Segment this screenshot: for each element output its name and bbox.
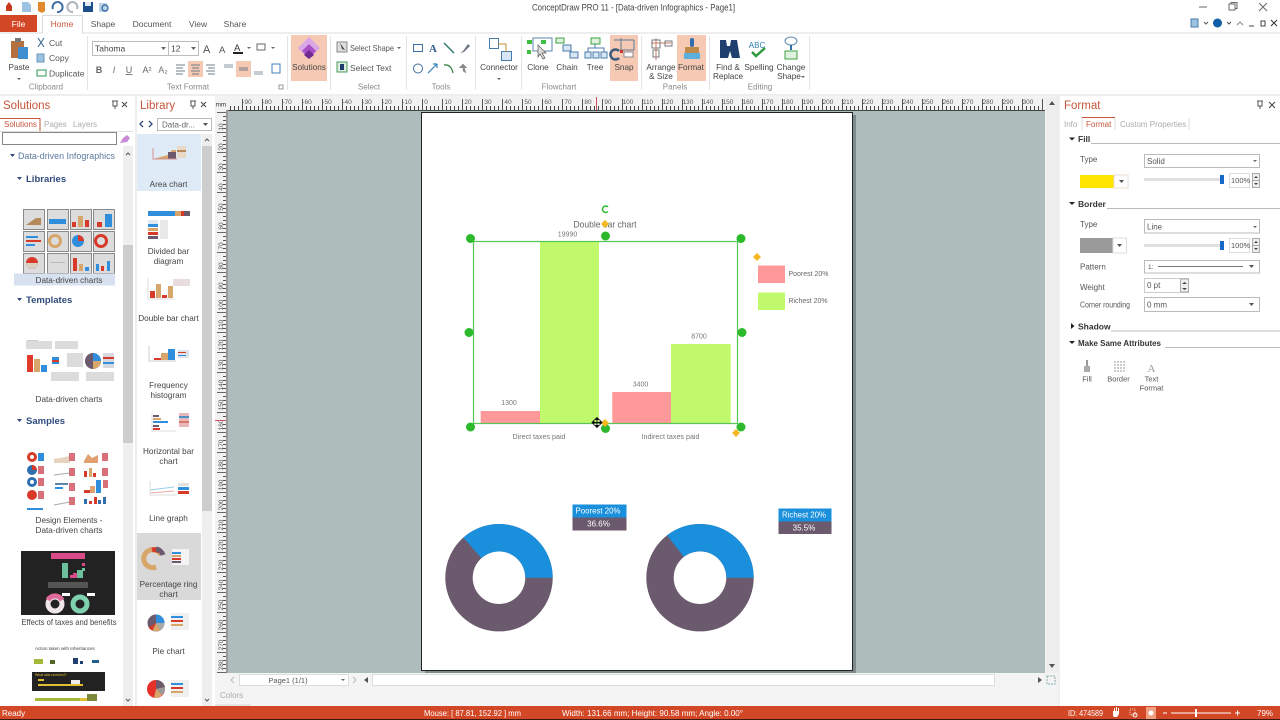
library scrollbar — [202, 134, 212, 706]
tree: Samples: Samples — [26, 416, 65, 427]
vertical ruler: 150 — [218, 399, 225, 410]
vertical ruler: 50 — [218, 203, 225, 211]
selection frame and handles — [464, 206, 761, 437]
status bar: 79% — [1257, 709, 1273, 718]
format panel title: Format — [1064, 100, 1101, 112]
horizontal ruler: 110 — [643, 99, 654, 106]
horizontal ruler: -30 — [362, 99, 372, 106]
ribbon button: Solutions — [291, 35, 327, 81]
bar: indirect taxes richest: 8700 — [691, 334, 707, 340]
sample thumbnail: Design Elements: Design Elements - — [36, 516, 103, 525]
canvas background and rulers — [215, 96, 1059, 706]
ribbon group: Editing — [713, 37, 806, 92]
format tabs — [1064, 118, 1189, 130]
section: Border: Line — [1147, 222, 1163, 232]
ribbon group: Panels: & Size — [649, 72, 673, 81]
library panel — [137, 96, 215, 706]
library item: Horizontal bar chart — [143, 413, 194, 466]
bar: direct taxes poorest — [481, 400, 540, 423]
section: Make Same Attributes: Make Same Attributes — [1078, 338, 1161, 348]
horizontal ruler: 150 — [723, 99, 734, 106]
ring label: richest: Richest 20% — [782, 510, 826, 520]
library navigation — [140, 118, 212, 130]
library item: Line graph — [149, 481, 189, 523]
horizontal ruler: 70 — [564, 99, 572, 106]
ribbon tabs: Document — [133, 19, 172, 29]
section: Border: Type — [1080, 220, 1098, 229]
vertical scrollbar — [1046, 97, 1058, 673]
horizontal ruler: 120 — [663, 99, 674, 106]
double bar chart — [481, 232, 731, 441]
library item: Pie chart: Pie chart — [152, 647, 185, 656]
legend — [758, 266, 828, 310]
solutions tabs: Solutions — [4, 120, 37, 129]
ribbon group: Clipboard: Paste — [9, 63, 30, 72]
vertical ruler: 210 — [218, 519, 225, 530]
vertical ruler: 130 — [218, 359, 225, 370]
vertical ruler: 10 — [218, 123, 225, 131]
ribbon group: Flowchart: Flowchart — [542, 82, 577, 92]
horizontal ruler: 60 — [544, 99, 552, 106]
ribbon group: Clipboard: Clipboard — [29, 82, 63, 92]
ribbon tabs: Shape — [91, 19, 116, 29]
ribbon group: Text Format: A₂ — [158, 65, 168, 75]
vertical ruler: 110 — [218, 319, 225, 330]
horizontal ruler: -50 — [322, 99, 332, 106]
library item: Frequency histogram: histogram — [151, 391, 187, 400]
section: Shadow: Shadow — [1078, 322, 1111, 332]
ring chart: richest — [646, 524, 754, 631]
vertical ruler: 80 — [218, 262, 225, 270]
legend: Poorest 20% — [788, 271, 828, 278]
vertical ruler: 260 — [218, 619, 225, 630]
search box — [2, 132, 130, 144]
status bar: ID: 474589 — [1068, 709, 1103, 718]
ribbon group: Flowchart: Tree — [587, 63, 604, 72]
library item: next chart thumbnail — [147, 680, 189, 698]
vertical ruler: 280 — [218, 659, 225, 670]
ribbon group: Select: Select — [358, 82, 381, 92]
horizontal ruler: 230 — [883, 99, 894, 106]
ribbon group: Editing: Find & — [716, 63, 740, 72]
ribbon group: Flowchart — [527, 35, 638, 92]
library item: Horizontal bar chart: Horizontal bar — [143, 447, 194, 456]
vertical ruler — [215, 110, 228, 673]
horizontal ruler: -20 — [382, 99, 392, 106]
ribbon group: Text Format: A — [219, 45, 226, 56]
ribbon group: Text Format: Text Format — [167, 82, 210, 92]
horizontal ruler: 200 — [823, 99, 834, 106]
horizontal ruler: 190 — [803, 99, 814, 106]
tab: Home: Home — [51, 19, 74, 29]
horizontal ruler: 130 — [683, 99, 694, 106]
solutions tabs — [0, 118, 133, 132]
vertical ruler: 30 — [218, 163, 225, 171]
horizontal ruler: 220 — [863, 99, 874, 106]
sample thumbnail: Design Elements — [27, 453, 108, 535]
status bar — [0, 706, 1280, 720]
sample thumbnail: Effects of taxes and benefits: Effects of taxes and benefits — [22, 618, 116, 627]
section: Border: Border — [1078, 199, 1107, 209]
solutions panel title: Solutions — [3, 100, 51, 112]
horizontal ruler: 90 — [604, 99, 612, 106]
section: Shadow — [1071, 322, 1280, 332]
library panel title: Library — [140, 100, 175, 112]
horizontal ruler: 30 — [484, 99, 492, 106]
vertical ruler: 230 — [218, 559, 225, 570]
ribbon group: Text Format: 12 — [171, 44, 181, 54]
section: Fill: 100% — [1231, 176, 1251, 185]
horizontal ruler: -60 — [302, 99, 312, 106]
section: Fill: Fill — [1078, 134, 1090, 144]
library item: Area chart: Area chart — [150, 180, 188, 189]
tab: Home — [42, 16, 82, 34]
horizontal ruler: 290 — [1003, 99, 1014, 106]
ribbon group: Text Format — [92, 42, 283, 92]
category label: direct taxes: Direct taxes paid — [512, 434, 566, 441]
horizontal ruler: 180 — [783, 99, 794, 106]
ribbon group: Text Format: Tahoma — [95, 44, 126, 54]
tab: File: File — [12, 19, 26, 29]
page navigation bar — [215, 673, 1059, 687]
format tabs: Info — [1064, 120, 1078, 129]
ring chart: poorest — [445, 524, 553, 631]
ribbon group: Panels: Arrange — [646, 63, 676, 72]
ring label: poorest: Poorest 20% — [576, 506, 620, 516]
legend: Richest 20% — [788, 298, 828, 305]
library item: Divided bar diagram: Divided bar — [148, 247, 189, 256]
ring label: poorest — [572, 504, 626, 530]
template thumbnail: Data-driven charts — [36, 395, 102, 404]
section: Make Same Attributes — [1069, 338, 1280, 392]
ribbon — [0, 35, 1280, 96]
section: Border — [1069, 199, 1280, 312]
bar: indirect taxes richest — [671, 334, 731, 423]
horizontal ruler: 160 — [743, 99, 754, 106]
ribbon group: Clipboard — [9, 38, 85, 92]
ribbon group: Panels: Panels — [663, 82, 687, 92]
vertical ruler: 90 — [218, 282, 225, 290]
library navigation: Data-dr... — [162, 120, 195, 130]
library item: Percentage ring chart: chart — [159, 590, 178, 599]
vertical ruler: 170 — [218, 439, 225, 450]
horizontal ruler: 170 — [763, 99, 774, 106]
library item: Double bar chart — [138, 278, 199, 323]
ribbon group: Text Format: U — [126, 65, 132, 75]
horizontal ruler: 50 — [524, 99, 532, 106]
ribbon group: Tools: Tools — [432, 82, 450, 92]
ribbon tabs: View — [189, 19, 208, 29]
ribbon group: Connector: Connector — [480, 63, 518, 72]
horizontal ruler: 140 — [703, 99, 714, 106]
horizontal ruler: mm — [216, 102, 226, 108]
ring label: richest: 35.5% — [793, 524, 815, 532]
ribbon group: Editing: ABC — [749, 41, 765, 50]
title bar — [6, 2, 1277, 28]
horizontal ruler: 300 — [1023, 99, 1034, 106]
ribbon group: Editing: Replace — [713, 72, 743, 81]
ribbon group: Clipboard: Cut — [49, 38, 63, 48]
selected library label — [14, 274, 115, 286]
vertical ruler: 70 — [218, 242, 225, 250]
ribbon tabs — [0, 15, 1280, 34]
ribbon group: Text Format: B — [96, 65, 103, 75]
library item: Pie chart — [148, 613, 189, 656]
ribbon group: Editing: Shape — [777, 72, 801, 81]
library icon grid — [24, 210, 114, 274]
vertical ruler: 140 — [218, 379, 225, 390]
ribbon group: Flowchart: Clone — [527, 63, 549, 72]
ribbon group: Text Format: A — [203, 44, 211, 56]
vertical ruler: 270 — [218, 639, 225, 650]
ribbon group: Text Format: A — [234, 43, 241, 54]
horizontal ruler: 250 — [923, 99, 934, 106]
bar: indirect taxes poorest: 3400 — [633, 382, 648, 388]
horizontal ruler: 80 — [584, 99, 592, 106]
button: Text Format — [1140, 363, 1164, 392]
section: Border: 100% — [1231, 241, 1251, 250]
section: Border: 0 mm — [1147, 300, 1167, 310]
library item: Divided bar diagram: diagram — [154, 257, 183, 266]
vertical ruler: 60 — [218, 222, 225, 230]
library item: Horizontal bar chart: chart — [159, 457, 178, 466]
bar: indirect taxes poorest — [612, 382, 671, 423]
window controls — [1191, 2, 1277, 28]
sample thumbnail: Effects of taxes and benefits — [21, 551, 116, 627]
page navigation bar: Page1 (1/1) — [268, 676, 308, 685]
horizontal ruler: 20 — [464, 99, 472, 106]
quick access toolbar — [6, 2, 108, 13]
library item: Percentage ring chart: Percentage ring — [140, 580, 198, 589]
status bar: Width: 131.66 mm; Height: 90.58 mm; Angle: 0.00° — [562, 709, 743, 718]
button: Fill: Fill — [1082, 374, 1092, 384]
ribbon group: Select: Select Shape — [350, 43, 394, 53]
vertical ruler: 200 — [218, 499, 225, 510]
ring label: richest — [778, 508, 832, 534]
horizontal ruler: 0 — [424, 99, 428, 106]
colors panel tab — [215, 691, 251, 706]
horizontal ruler: -70 — [282, 99, 292, 106]
tree: Templates: Templates — [26, 295, 72, 306]
category label: indirect taxes: Indirect taxes paid — [642, 434, 700, 441]
status bar: Mouse: [ 87.81, 152.92 ] mm — [424, 709, 521, 718]
ribbon group: Clipboard: Copy — [49, 53, 70, 63]
solutions tabs: Pages — [44, 120, 67, 129]
solutions scrollbar — [123, 146, 133, 706]
library item: Double bar chart: Double bar chart — [138, 314, 199, 323]
ribbon group: Flowchart: Snap — [614, 63, 634, 72]
bar: direct taxes richest — [540, 232, 599, 423]
ribbon tabs: Share — [224, 19, 247, 29]
section: Border: Corner rounding — [1080, 300, 1130, 310]
horizontal ruler: 40 — [504, 99, 512, 106]
solutions panel — [0, 96, 137, 706]
horizontal ruler — [215, 97, 1046, 111]
ribbon group: Flowchart: Chain — [556, 63, 578, 72]
section: Border: 0 pt — [1147, 281, 1161, 290]
format tabs: Format — [1086, 120, 1112, 129]
horizontal ruler: 270 — [963, 99, 974, 106]
horizontal ruler: 10 — [444, 99, 452, 106]
ribbon group: Select — [337, 42, 401, 92]
horizontal ruler: -80 — [262, 99, 272, 106]
colors panel tab: Colors — [220, 691, 243, 700]
vertical ruler: 220 — [218, 539, 225, 550]
format tabs: Custom Properties — [1120, 120, 1186, 129]
status bar: Ready — [2, 709, 25, 718]
section: Border: 1: — [1148, 264, 1154, 271]
ribbon group: Clipboard: Duplicate — [49, 68, 85, 78]
vertical ruler: 40 — [218, 183, 225, 191]
sample thumbnail: Design Elements: Data-driven charts — [36, 526, 102, 535]
button: Border: Border — [1107, 374, 1130, 384]
sample thumbnail: Action taken with inheritances — [32, 646, 105, 701]
ribbon group: Panels — [646, 35, 706, 92]
chart title: Double bar chart — [574, 220, 637, 230]
ribbon group: Select: Select Text — [350, 63, 392, 73]
button: Text Format: Text — [1145, 374, 1159, 384]
button: Text Format: Format — [1140, 384, 1164, 392]
document title: ConceptDraw PRO 11 - [Data-driven Infographics - Page1] — [532, 2, 735, 12]
horizontal ruler: 280 — [983, 99, 994, 106]
section: Border: Weight — [1080, 283, 1106, 292]
ribbon group: Editing: Editing — [748, 82, 772, 92]
ring label: poorest: 36.6% — [587, 520, 610, 528]
library item: Frequency histogram: Frequency — [149, 381, 189, 390]
library item: Frequency histogram — [149, 346, 189, 400]
format panel — [1058, 96, 1280, 706]
button: Text Format: A — [1148, 363, 1156, 375]
tree: Libraries: Libraries — [26, 174, 66, 185]
tab: File — [0, 15, 37, 32]
horizontal ruler: -90 — [242, 99, 252, 106]
library item: Area chart — [137, 134, 201, 191]
ribbon button: Solutions: Solutions — [292, 63, 326, 72]
ribbon group: Text Format: I — [113, 65, 116, 75]
horizontal ruler: 240 — [903, 99, 914, 106]
button: Border — [1107, 362, 1130, 384]
ribbon group: Tools: A — [429, 43, 437, 55]
library item: Line graph: Line graph — [149, 514, 188, 523]
horizontal ruler: 100 — [623, 99, 634, 106]
horizontal ruler: 210 — [843, 99, 854, 106]
horizontal ruler: -40 — [342, 99, 352, 106]
ribbon group: Editing: Change — [777, 63, 806, 72]
sample thumbnail: Action taken with inheritances: What was received? — [35, 673, 67, 677]
ribbon group: Connector — [480, 38, 518, 80]
horizontal ruler: 260 — [943, 99, 954, 106]
library item: Percentage ring chart — [137, 533, 201, 600]
vertical ruler: 160 — [218, 419, 225, 430]
solutions tabs: Layers — [73, 120, 97, 129]
template thumbnail — [26, 340, 114, 404]
drawing page — [422, 112, 856, 673]
vertical ruler: 180 — [218, 459, 225, 470]
horizontal ruler: -10 — [402, 99, 412, 106]
selected library label: Data-driven charts — [36, 276, 102, 285]
button: Fill — [1082, 360, 1092, 384]
vertical ruler: 240 — [218, 579, 225, 590]
section: Fill: Solid — [1147, 157, 1165, 166]
bar: direct taxes poorest: 1300 — [501, 400, 517, 407]
vertical ruler: 20 — [218, 143, 225, 151]
vertical ruler: 250 — [218, 599, 225, 610]
vertical ruler: 120 — [218, 339, 225, 350]
vertical ruler: 100 — [218, 299, 225, 310]
tree: Data-driven Infographics: Data-driven Infographics — [18, 151, 116, 161]
vertical ruler: 190 — [218, 479, 225, 490]
ribbon group: Text Format: A² — [142, 65, 152, 75]
section: Fill — [1069, 134, 1280, 188]
section: Border: Pattern — [1080, 262, 1106, 272]
library item: Divided bar diagram — [148, 211, 190, 266]
ribbon group: Panels: Format — [678, 63, 705, 72]
ribbon group: Editing: Spelling — [744, 63, 774, 72]
sample thumbnail: Action taken with inheritances: Action taken with Inheritances — [35, 646, 96, 651]
ribbon group: Tools — [414, 43, 470, 92]
bar: direct taxes richest: 19990 — [558, 232, 577, 238]
section: Fill: Type — [1080, 155, 1098, 164]
